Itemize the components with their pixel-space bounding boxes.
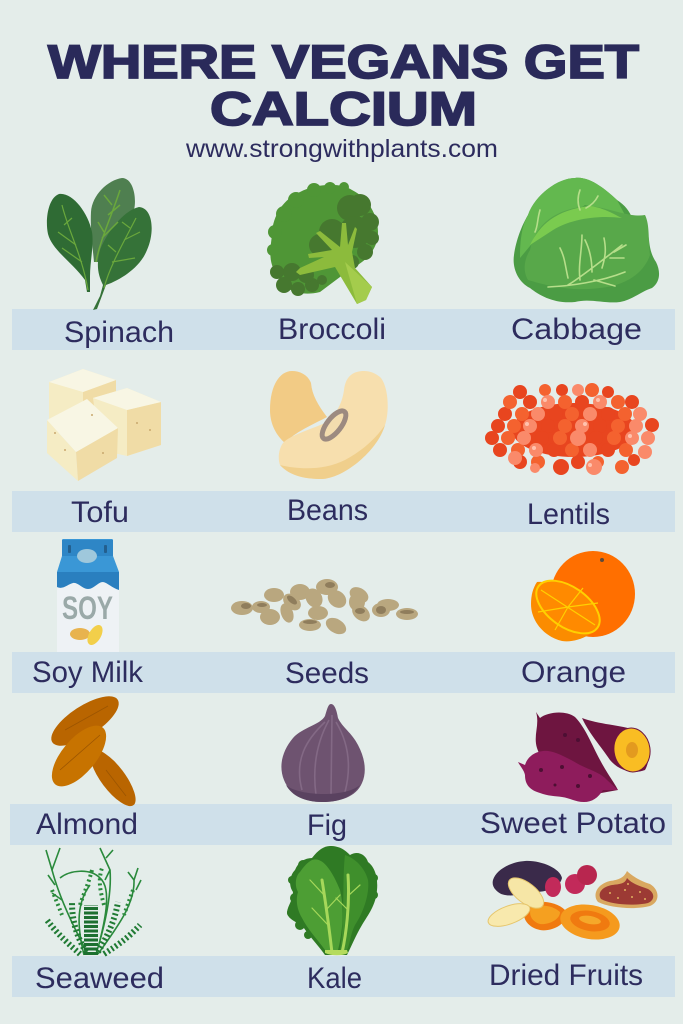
label band row 3 [12, 652, 675, 693]
icon: tofu [47, 369, 161, 481]
label band row 1 [12, 309, 675, 350]
icon: cabbage [514, 178, 659, 302]
icon: fig [281, 704, 365, 802]
icon: orange [527, 551, 635, 644]
icon: kale [287, 846, 378, 955]
label band row 5 [12, 956, 675, 997]
icon: spinach [47, 178, 152, 310]
label: Cabbage: Cabbage [511, 313, 642, 346]
icon: seaweed [46, 848, 141, 955]
label: Lentils: Lentils [527, 498, 610, 531]
label: Seaweed: Seaweed [35, 962, 164, 995]
icon: lentils [485, 383, 659, 475]
title: WHERE VEGANS GET [48, 35, 639, 88]
title: CALCIUM [210, 82, 477, 135]
label: Sweet Potato: Sweet Potato [480, 807, 666, 840]
icon: sweet potato [518, 712, 653, 802]
label: Almond: Almond [36, 808, 138, 841]
label: Orange: Orange [521, 656, 626, 689]
website url: www.strongwithplants.com [185, 135, 498, 163]
label: Broccoli: Broccoli [278, 313, 386, 346]
icon: broccoli [267, 182, 379, 304]
icon: dried fruits [485, 861, 658, 944]
label: Spinach: Spinach [64, 316, 174, 349]
label: Soy Milk: Soy Milk [32, 656, 144, 689]
title [48, 35, 639, 135]
label: Tofu: Tofu [71, 496, 129, 529]
label band row 4 [10, 804, 672, 845]
icon: beans [270, 371, 388, 479]
icon: soy milk carton [57, 539, 119, 652]
label: Kale: Kale [307, 962, 362, 995]
icon: almonds [42, 687, 143, 812]
label: Fig: Fig [307, 809, 347, 842]
label band row 2 [12, 491, 675, 532]
icon: seeds [231, 579, 418, 638]
label: Seeds: Seeds [285, 657, 369, 690]
label: Dried Fruits: Dried Fruits [489, 959, 643, 992]
icon: soy milk carton: SOY [62, 590, 113, 626]
label: Beans: Beans [287, 494, 368, 527]
